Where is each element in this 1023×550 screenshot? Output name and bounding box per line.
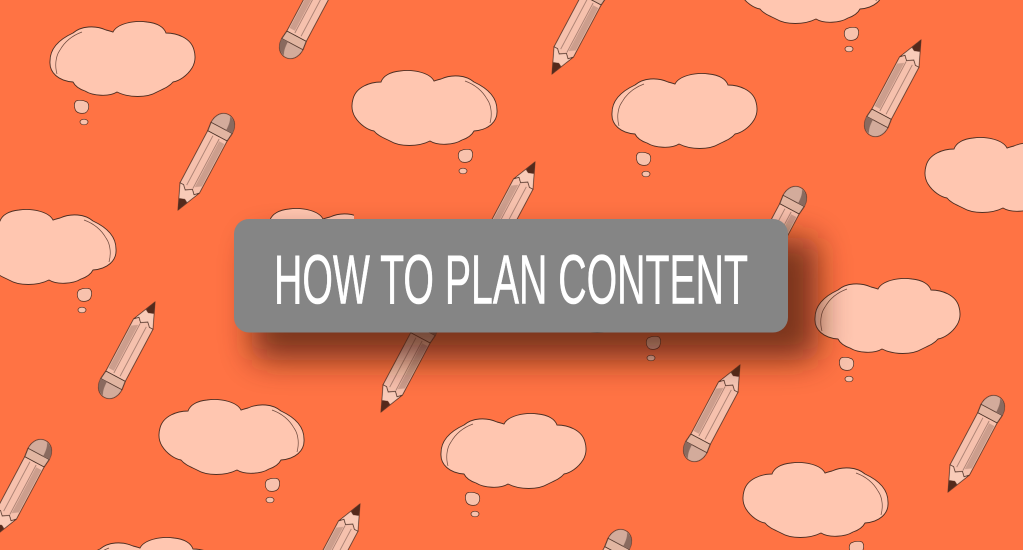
cloud upper centre <box>352 70 497 174</box>
pencil behind title centre <box>474 156 546 263</box>
cloud top left <box>50 21 195 125</box>
pencil bottom right cropped <box>564 525 636 550</box>
pencil left <box>167 109 239 216</box>
title banner <box>234 219 788 332</box>
cloud behind title left <box>270 208 354 219</box>
pencil top centre left <box>275 0 347 63</box>
cloud bottom left cropped <box>77 537 222 550</box>
pencil far right <box>937 391 1009 498</box>
pencil below title <box>370 311 442 418</box>
cloud lower right <box>743 462 888 550</box>
pencil lower right centre <box>679 359 751 466</box>
pencil bottom left cropped <box>0 435 56 542</box>
title banner shadow <box>252 238 818 360</box>
cloud far right cropped <box>925 137 1023 241</box>
cloud far left cropped <box>0 209 116 313</box>
pencil lower left <box>94 296 166 403</box>
cloud lower centre <box>441 413 586 517</box>
cloud lower left <box>159 399 304 503</box>
cloud right middle <box>815 278 960 382</box>
pencil bottom centre cropped <box>299 498 371 550</box>
pencil top centre right <box>541 0 613 80</box>
cloud behind title right <box>540 257 685 361</box>
cloud top right cropped <box>738 0 883 52</box>
pencil behind title right <box>739 182 811 289</box>
cloud upper centre right <box>612 73 757 177</box>
pencil top right <box>860 34 932 141</box>
